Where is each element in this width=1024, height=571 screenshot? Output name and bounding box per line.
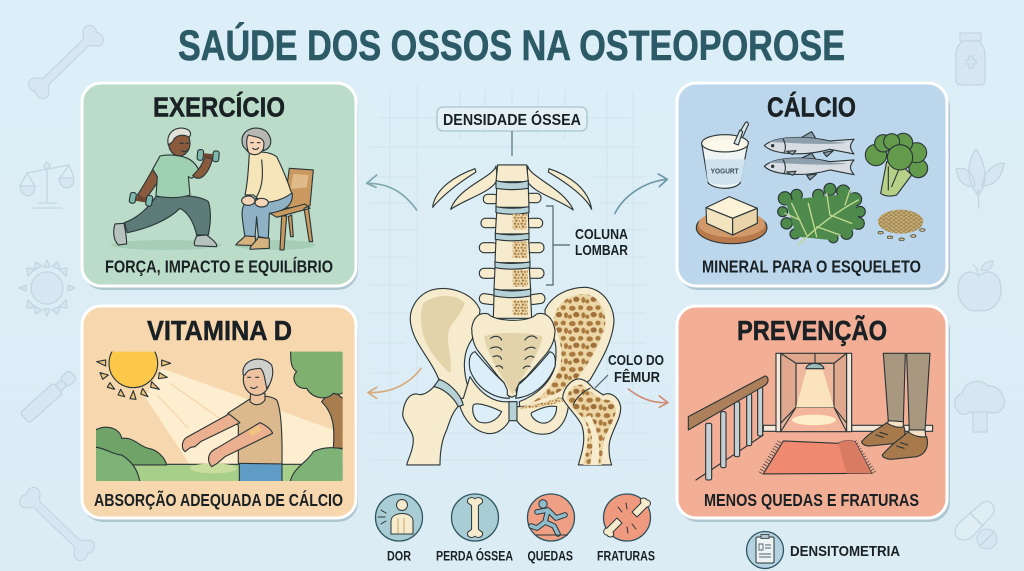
symptom: perda óssea	[436, 494, 513, 564]
margin icon: medicine bottle	[956, 33, 985, 85]
arrow: para vitamina D	[368, 368, 421, 398]
illustration: idosos se exercitando	[111, 128, 316, 250]
pelvic openings	[469, 352, 509, 398]
caption: exercício: FORÇA, IMPACTO E EQUILÍBRIO	[105, 256, 333, 276]
symptom: dor: DOR	[387, 548, 411, 564]
symptom: quedas: QUEDAS	[528, 548, 573, 564]
title: SAÚDE DOS OSSOS NA OSTEOPOROSE	[178, 21, 845, 70]
panel: exercício	[82, 83, 358, 290]
densitometria: DENSITOMETRIA	[790, 543, 900, 560]
ribs	[433, 166, 592, 210]
symptom: fraturas: FRATURAS	[597, 548, 655, 564]
symptom: fraturas	[597, 494, 655, 564]
arrow: para prevenção	[628, 389, 668, 407]
margin icon: bone top left	[26, 23, 106, 101]
label: densidade óssea: DENSIDADE ÓSSEA	[443, 110, 581, 129]
label: colo do fêmur: FÊMUR	[614, 368, 660, 386]
margin icon: sun	[19, 260, 75, 316]
illustration: alimentos com cálcio: YOGURT	[711, 166, 739, 175]
margin icon: pills	[955, 501, 997, 549]
margin icon: syringe tube	[20, 369, 78, 423]
heading: cálcio: CÁLCIO	[767, 92, 856, 122]
illustration: alimentos com cálcio	[696, 122, 928, 245]
label: colo do fêmur	[595, 352, 664, 388]
background grid	[370, 85, 650, 460]
illustration: exposição ao sol	[96, 352, 343, 481]
margin icon: apple	[958, 261, 1001, 311]
panel: cálcio	[677, 83, 950, 290]
caption: cálcio: MINERAL PARA O ESQUELETO	[702, 256, 921, 276]
margin icon: bone bottom left	[17, 485, 97, 563]
heading: vitamina D: VITAMINA D	[147, 315, 292, 346]
caption: prevenção: MENOS QUEDAS E FRATURAS	[704, 490, 919, 510]
sacrum	[472, 313, 555, 397]
arrow: para cálcio	[615, 174, 667, 213]
margin icon: scale	[20, 162, 74, 208]
illustration: casa segura	[688, 353, 933, 480]
lumbar vertebrae	[479, 165, 546, 318]
label: densidade óssea	[437, 107, 587, 156]
symptom: quedas	[528, 494, 574, 564]
central skeleton: coluna lombar e pelve	[403, 165, 621, 465]
right ilium spongy	[519, 287, 614, 410]
label: coluna lombar	[546, 206, 628, 285]
caption: vitamina D: ABSORÇÃO ADEQUADA DE CÁLCIO	[94, 489, 343, 510]
label: colo do fêmur: COLO DO	[608, 352, 664, 369]
margin icon: leaves	[956, 149, 1004, 208]
label: coluna lombar: COLUNA	[575, 226, 628, 243]
margin icon: broccoli	[955, 381, 1004, 432]
panel: prevenção	[677, 306, 950, 522]
right femur spongy	[563, 379, 621, 465]
left ilium	[410, 289, 480, 402]
heading: prevenção: PREVENÇÃO	[737, 315, 887, 346]
heading: exercício: EXERCÍCIO	[153, 92, 285, 122]
label: coluna lombar: LOMBAR	[575, 242, 628, 259]
symptom: dor	[376, 494, 422, 564]
left femur	[403, 385, 460, 465]
pubic arch	[458, 377, 509, 434]
symptom: perda óssea: PERDA ÓSSEA	[436, 548, 513, 564]
panel: vitamina D	[82, 306, 358, 522]
densitometria	[746, 532, 900, 568]
arrow: para exercício	[367, 175, 417, 210]
